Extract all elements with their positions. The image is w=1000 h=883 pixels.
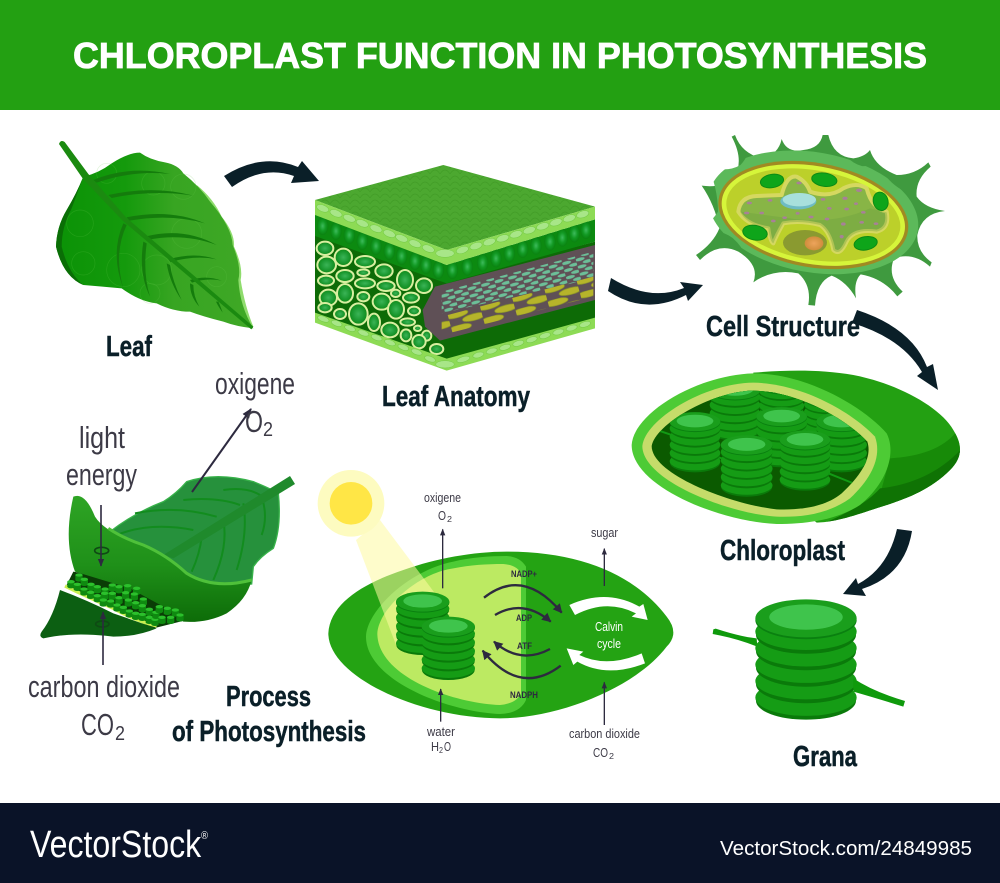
- water vacuole: [780, 193, 816, 209]
- thylakoid zone lime: [377, 564, 521, 705]
- label: Calvin cycle: Calvin: [595, 619, 623, 634]
- leaf veins: [117, 489, 265, 580]
- footer logo text: ®: [201, 830, 208, 842]
- label: light energy: light: [79, 420, 125, 455]
- outer membrane rim: [632, 373, 890, 524]
- cytoplasm: [719, 156, 908, 274]
- stomata: [95, 547, 109, 627]
- thylakoid lamella right: [853, 678, 905, 707]
- label: Leaf Anatomy: Leaf Anatomy: [382, 381, 530, 413]
- footer watermark bar: [0, 803, 1000, 883]
- midrib: [163, 476, 295, 558]
- small label: oxigene O2: O: [438, 509, 446, 523]
- label: carbon dioxide CO2: carbon dioxide: [28, 669, 180, 704]
- arrow: anatomy to cell: [608, 278, 703, 305]
- cell structure illustration: [696, 135, 945, 306]
- thin flow arrows: [441, 529, 604, 725]
- palisade cells: [317, 217, 592, 279]
- label: Process of Photosynthesis: Process: [226, 681, 311, 713]
- small label: oxigene O2: 2: [447, 515, 453, 524]
- label: light energy: energy: [66, 457, 137, 492]
- footer logo text: VectorStock: [30, 824, 233, 866]
- palisade band: [315, 213, 595, 283]
- calvin cycle arrows: [567, 597, 648, 670]
- leaf illustration: [56, 141, 253, 329]
- vacuole: [738, 177, 887, 252]
- small label: water H2O: water: [426, 725, 455, 739]
- grana stacks: [396, 592, 475, 680]
- small label: carbon dioxide CO2: CO: [593, 746, 608, 760]
- reaction labels: NADP+: [511, 569, 537, 580]
- cell wall body: [713, 150, 918, 274]
- label: carbon dioxide CO2: 2: [115, 723, 125, 745]
- cell wall spikes: [696, 135, 945, 306]
- chloroplast outer body: [753, 371, 960, 523]
- reaction labels: ADP: [516, 613, 533, 624]
- label: Calvin cycle: cycle: [597, 636, 621, 651]
- process leaf illustration: [40, 476, 295, 638]
- label: oxigene O2: [215, 366, 295, 441]
- label: Process of Photosynthesis: [172, 681, 366, 748]
- dark tissue behind cylinders: [67, 572, 187, 628]
- arrow: cell to chloroplast: [852, 310, 938, 390]
- arrow: chloroplast to grana: [843, 529, 912, 596]
- thylakoid stack: [755, 599, 857, 720]
- chloroplasts: [742, 171, 890, 252]
- grana illustration: [713, 599, 905, 720]
- inner membrane rim: [642, 383, 877, 517]
- small label: carbon dioxide CO2: 2: [609, 752, 615, 761]
- membrane: [710, 147, 917, 283]
- cross section cylinders: [67, 573, 184, 626]
- leaf anatomy block: [315, 165, 595, 371]
- footer url: VectorStock.com/24849985: [720, 838, 972, 860]
- label: Leaf: Leaf: [106, 331, 152, 363]
- small label: water H2O: 2: [439, 746, 443, 755]
- grana stacks: [660, 390, 867, 497]
- thylakoid lamella left: [713, 629, 757, 647]
- small label: water H2O: [426, 725, 455, 755]
- chloroplast illustration: [632, 371, 967, 527]
- bottom epidermis: [315, 313, 595, 371]
- label: oxigene O2: O: [245, 404, 263, 439]
- label: carbon dioxide CO2: [28, 669, 180, 745]
- label: Chloroplast: Chloroplast: [720, 535, 845, 567]
- top surface: [315, 165, 595, 250]
- dark lower leaf: [40, 590, 157, 638]
- reaction labels: ATF: [517, 641, 532, 652]
- title banner: [0, 0, 1000, 110]
- label: oxigene O2: oxigene: [215, 366, 295, 401]
- small label: carbon dioxide CO2: [569, 727, 640, 761]
- small label: water H2O: O: [444, 740, 451, 754]
- label: Cell Structure: Cell Structure: [706, 311, 860, 343]
- label: Calvin cycle: [595, 619, 623, 651]
- vascular bundle: [423, 245, 595, 341]
- reaction labels: [510, 569, 538, 701]
- chloroplast body: [328, 552, 673, 718]
- folded front leaf: [69, 496, 252, 622]
- small label: oxigene O2: [424, 491, 461, 524]
- back leaf: [110, 477, 279, 586]
- label: Grana: Grana: [793, 741, 858, 773]
- sun: [318, 470, 384, 537]
- spongy cells: [317, 242, 443, 354]
- arrow: leaf to anatomy: [224, 161, 319, 187]
- small label: carbon dioxide CO2: carbon dioxide: [569, 727, 640, 741]
- nucleus: [783, 230, 827, 255]
- pink organelles: [744, 182, 878, 238]
- lime cut edge: [65, 586, 157, 626]
- thylakoid zone outer: [366, 556, 526, 714]
- small label: sugar: sugar: [591, 526, 618, 540]
- label: oxigene O2: 2: [263, 419, 273, 441]
- label: light energy: [66, 420, 137, 492]
- reaction arrows: [483, 585, 562, 678]
- reaction labels: NADPH: [510, 690, 538, 701]
- small label: oxigene O2: oxigene: [424, 491, 461, 505]
- body shading: [827, 433, 960, 522]
- title: CHLOROPLAST FUNCTION IN PHOTOSYNTHESIS: [73, 35, 927, 76]
- stroma interior: [652, 391, 869, 509]
- pointer arrows on process leaf: [101, 409, 251, 665]
- sun beam: [356, 520, 450, 647]
- upper epidermis: [315, 200, 595, 265]
- small label: water H2O: H: [431, 740, 439, 754]
- tissue body: [315, 233, 595, 359]
- label: Process of Photosynthesis: of Photosynthesis: [172, 716, 366, 748]
- label: carbon dioxide CO2: CO: [81, 707, 114, 742]
- photosynthesis chloroplast diagram: [318, 470, 673, 725]
